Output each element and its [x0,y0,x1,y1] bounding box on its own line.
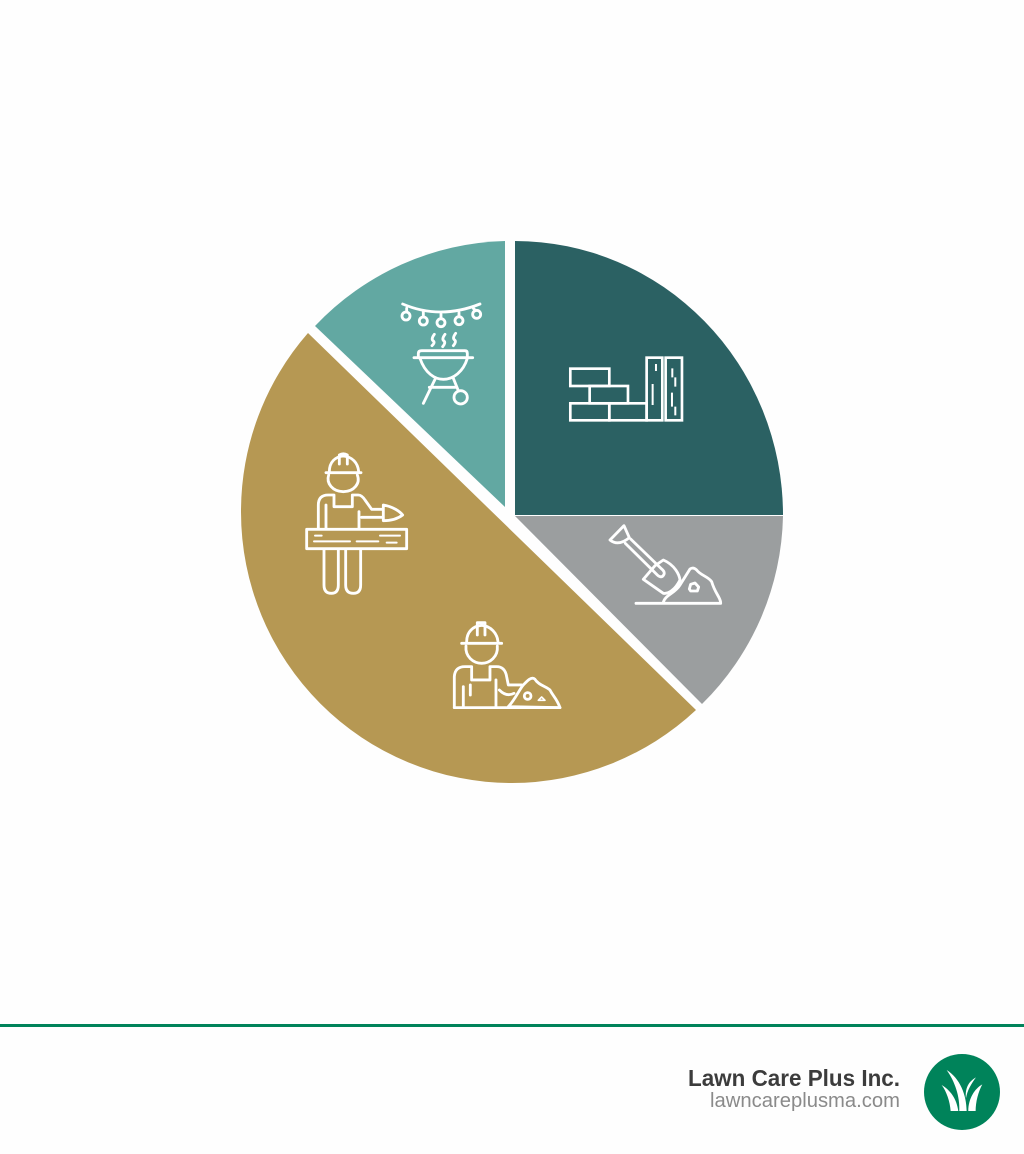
pie chart [241,241,783,783]
slice: gray [515,516,783,704]
slice: gold [241,333,696,783]
footer website: lawncareplusma.com [710,1090,900,1112]
logo: green circle with grass [924,1054,1000,1130]
footer divider [0,1024,1024,1027]
slice: dark teal [515,241,783,515]
icon: worker with soil pile [454,623,560,708]
icon: worker holding board and trowel [307,454,407,593]
footer brand name: Lawn Care Plus Inc. [688,1065,900,1091]
icon: shovel and soil pile [610,526,721,603]
slice: light teal [315,241,505,507]
icon: string lights and barbecue grill [402,304,481,404]
icon: bricks and lumber planks [570,358,682,420]
